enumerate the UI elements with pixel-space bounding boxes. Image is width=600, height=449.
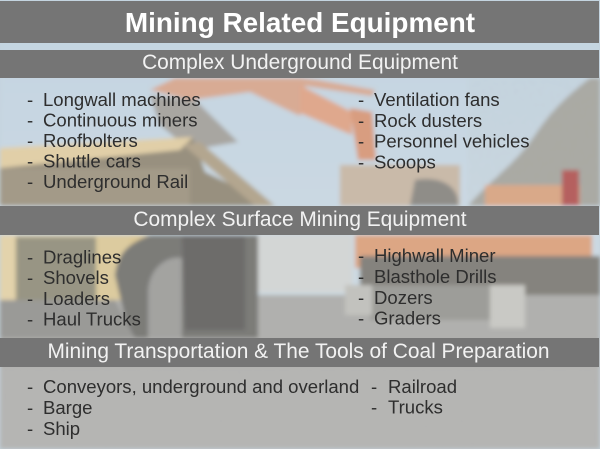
list: transportation right [371,376,457,418]
title bar [0,1,599,43]
list: surface left: Shovels [43,267,109,288]
heading: underground: Complex Underground Equipment [142,51,458,74]
list: underground right: Personnel vehicles [374,130,530,152]
truck tyre and chassis [115,235,258,338]
section bar: transportation [0,338,599,367]
list: surface left: - [27,246,33,268]
title: Mining Related Equipment [125,7,475,38]
list: underground left: - [27,89,33,110]
list: transportation left: - [27,376,33,397]
heading: transportation: Mining Transportation & The Tools of Coal Preparation [47,340,550,363]
list: underground right: - [358,89,364,110]
list: surface right: Graders [374,308,441,328]
section bar: underground [0,50,599,78]
list: surface left: Draglines [43,246,121,268]
list: underground left: - [27,110,33,130]
list: underground left: - [27,130,33,151]
list: transportation left: Barge [43,397,92,418]
list: underground right: - [358,130,364,152]
excavator arm [150,78,375,116]
rock hill [468,78,600,206]
list: underground right: Scoops [374,152,436,172]
list: underground right: Rock dusters [374,110,482,131]
ground [0,295,600,449]
list: underground left: Roofbolters [43,130,138,151]
list: surface left: - [27,288,33,309]
gravel pile [250,235,352,292]
list: underground left: - [27,171,33,192]
list: transportation right: - [371,396,377,418]
list: transportation left: Ship [43,418,80,439]
dump truck [0,138,275,206]
list: transportation left [27,376,359,439]
list: surface left: - [27,267,33,288]
list: surface left: Haul Trucks [43,308,141,330]
excavator body [340,165,460,206]
list: underground left: - [27,150,33,172]
list: underground left: Underground Rail [43,171,188,192]
list: transportation right: - [371,376,377,397]
list: transportation right: Trucks [388,396,443,418]
list: surface left [27,246,141,330]
list: transportation left: - [27,397,33,418]
section bar: surface [0,206,599,235]
list: underground left: Continuous miners [43,110,198,130]
list: surface right: - [358,308,364,328]
list: underground left [27,89,201,192]
list: surface right: - [358,245,364,266]
list: surface right: Blasthole Drills [374,266,497,287]
list: surface left: Loaders [43,288,110,309]
list: underground right [358,89,530,172]
list: underground left: Shuttle cars [43,150,141,172]
list: transportation left: - [27,418,33,439]
list: underground right: Ventilation fans [374,89,500,110]
list: transportation left: Conveyors, underground and overland [43,376,359,397]
list: surface right: Highwall Miner [374,245,496,266]
list: surface right: - [358,287,364,308]
list: transportation right: Railroad [388,376,457,397]
list: surface left: - [27,308,33,330]
list: surface right: - [358,266,364,287]
list: underground left: Longwall machines [43,89,201,110]
list: surface right [358,245,497,328]
bucket [150,96,238,150]
list: underground right: - [358,110,364,131]
heading: surface: Complex Surface Mining Equipment [133,208,467,231]
list: underground right: - [358,152,364,172]
list: surface right: Dozers [374,287,433,308]
